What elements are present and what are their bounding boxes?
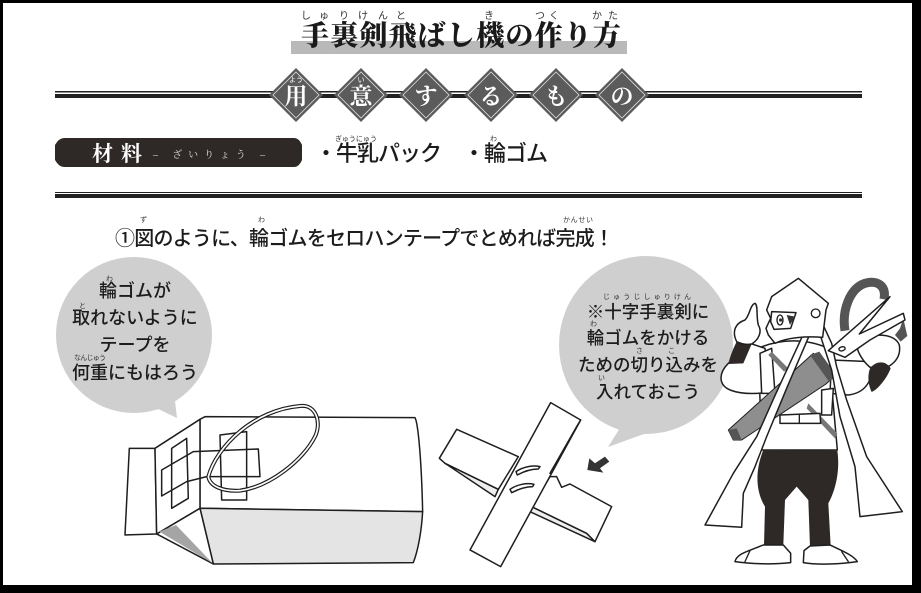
title furigana: けん xyxy=(358,10,388,22)
diamond の xyxy=(595,68,649,122)
left sleeve xyxy=(721,343,772,394)
title furigana: り xyxy=(339,10,349,22)
right cuff xyxy=(868,362,891,392)
sword scabbard xyxy=(728,353,836,440)
section rule xyxy=(55,192,862,198)
diamond る xyxy=(464,68,518,122)
section header: 用意するもの xyxy=(55,68,862,122)
materials label: – ざいりょう – xyxy=(152,149,266,161)
icon: ninja character xyxy=(705,278,907,564)
front strip xyxy=(470,403,581,567)
bubble text xyxy=(72,275,198,383)
diamond す: す xyxy=(414,84,438,109)
title text: 手裏剣飛ばし機の作り方 xyxy=(301,19,621,52)
hood xyxy=(766,278,828,343)
right ribbon xyxy=(815,318,902,517)
right shoe xyxy=(803,545,857,564)
right sleeve xyxy=(830,360,872,395)
bubble text: テープを xyxy=(100,335,170,355)
item: rubber band: ・輪ゴム xyxy=(463,141,548,166)
diamond も xyxy=(529,68,583,122)
materials label: 材料 xyxy=(92,142,142,166)
speech bubble left xyxy=(56,257,212,418)
diamond る: る xyxy=(480,84,502,109)
diamond も: も xyxy=(544,84,568,109)
icon: cross shuriken xyxy=(439,403,612,567)
bubble text xyxy=(578,293,718,402)
bubble text: と xyxy=(79,302,86,310)
face xyxy=(771,312,796,329)
torso xyxy=(758,341,837,450)
bubble text: さ xyxy=(636,347,643,355)
left hand xyxy=(734,303,760,344)
right hand xyxy=(857,335,900,367)
diamond 意 xyxy=(334,68,388,122)
instruction text: かんせい xyxy=(563,216,593,224)
left ribbon xyxy=(705,318,817,527)
title furigana xyxy=(301,10,618,22)
diamond す xyxy=(399,68,453,122)
instruction text: わ xyxy=(258,216,265,224)
title furigana: かた xyxy=(592,10,618,22)
diamond 意: い xyxy=(358,76,364,84)
diamond 意: 意 xyxy=(350,84,374,109)
instruction text: ず xyxy=(140,215,147,224)
arrow xyxy=(587,457,609,473)
bubble text: 入れておこう xyxy=(596,382,700,402)
bubble text: なんじゅう xyxy=(74,354,106,362)
diamond 用: 用 xyxy=(284,84,308,109)
slits xyxy=(516,466,540,475)
materials list xyxy=(315,134,548,166)
title xyxy=(291,10,627,54)
title highlight band xyxy=(291,41,627,54)
carton slanted face xyxy=(155,419,200,534)
bubble text: 取れないように xyxy=(72,308,198,328)
carton spout flap xyxy=(125,448,157,535)
materials label xyxy=(55,138,302,167)
carton lower triangle xyxy=(157,508,213,564)
carton body lower shaded xyxy=(200,508,423,564)
scissors handles xyxy=(844,282,884,331)
title furigana: しゅ xyxy=(301,10,329,22)
instruction text: ①図のように、輪ゴムをセロハンテープでとめれば完成！ xyxy=(115,226,614,250)
left cuff xyxy=(728,342,752,364)
bubble text: じゅうじしゅりけん xyxy=(603,293,691,301)
bubble text: こ xyxy=(668,347,675,355)
bubble text: ための切り込みを xyxy=(578,355,718,375)
item: milk carton: ・牛乳パック xyxy=(315,141,442,166)
diamond の: の xyxy=(610,84,634,109)
title furigana: き xyxy=(484,10,494,22)
icon: milk carton with rubber band xyxy=(125,406,423,564)
tape pieces xyxy=(172,438,188,508)
speech bubble right xyxy=(559,256,733,447)
header double rule xyxy=(55,91,862,98)
bubble text: わ xyxy=(590,320,597,328)
trousers xyxy=(757,450,838,547)
rubber band xyxy=(208,406,318,491)
title furigana: つく xyxy=(535,11,559,22)
knot xyxy=(811,309,820,318)
bubble text: 輪ゴムをかける xyxy=(587,328,709,348)
bubble text: 輪ゴムが xyxy=(99,280,171,301)
carton body top xyxy=(200,417,423,512)
diamond 用: よう xyxy=(289,76,303,84)
bubble text: わ xyxy=(106,275,113,283)
diamond 用 xyxy=(269,68,323,122)
item: rubber band: わ xyxy=(490,135,497,143)
back strip xyxy=(445,463,498,497)
instruction text xyxy=(115,215,614,250)
bubble text: ※十字手裏剣に xyxy=(587,302,709,322)
bubble text: い xyxy=(598,374,605,382)
scissors blades xyxy=(828,297,905,357)
item: milk carton: ぎゅうにゅう xyxy=(335,134,377,143)
title furigana: と xyxy=(396,10,406,22)
bubble text: 何重にもはろう xyxy=(72,363,198,383)
left shoe xyxy=(735,545,791,564)
chest straps and vest xyxy=(760,348,775,393)
